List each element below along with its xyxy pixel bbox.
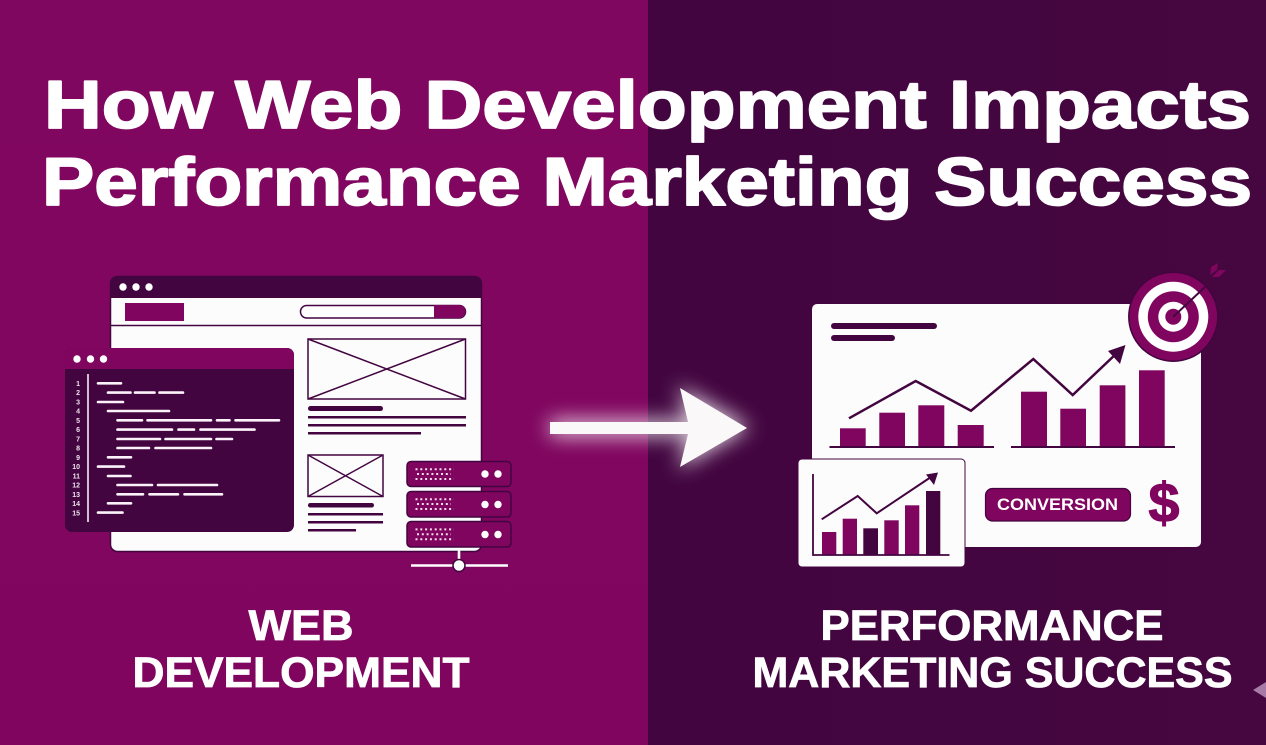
line numbers: 11 bbox=[73, 474, 80, 480]
line numbers: 15 bbox=[72, 510, 80, 518]
title bbox=[42, 67, 1252, 220]
line numbers: 9 bbox=[76, 455, 80, 462]
label: performance marketing success: PERFORMANCE bbox=[820, 602, 1164, 650]
dollar sign icon: $ bbox=[1148, 471, 1180, 534]
line numbers: 10 bbox=[72, 464, 80, 471]
small chart card bbox=[798, 459, 965, 567]
title: Performance Marketing Success bbox=[42, 144, 1252, 220]
line numbers: 6 bbox=[76, 427, 80, 434]
arrow: web development to performance marketing bbox=[550, 386, 750, 469]
line numbers: 13 bbox=[72, 492, 80, 499]
line numbers bbox=[72, 381, 80, 518]
corner mark bbox=[1253, 682, 1266, 698]
server stack bbox=[407, 462, 511, 572]
label: web development: DEVELOPMENT bbox=[132, 649, 469, 697]
label: performance marketing success bbox=[752, 602, 1232, 697]
line numbers: 1 bbox=[76, 381, 80, 388]
browser window bbox=[110, 276, 482, 552]
line numbers: 12 bbox=[72, 482, 80, 490]
line numbers: 3 bbox=[76, 400, 80, 406]
line numbers: 7 bbox=[76, 436, 80, 444]
line numbers: 4 bbox=[76, 408, 80, 416]
target icon bbox=[1129, 263, 1226, 361]
conversion badge: CONVERSION bbox=[997, 496, 1118, 514]
performance marketing illustration bbox=[798, 263, 1226, 567]
code editor window bbox=[65, 348, 294, 532]
label: performance marketing success: MARKETING SUCCESS bbox=[752, 649, 1232, 697]
line numbers: 8 bbox=[76, 446, 80, 452]
title: How Web Development Impacts bbox=[44, 67, 1251, 143]
right background panel bbox=[648, 0, 1266, 745]
label: web development: WEB bbox=[248, 602, 354, 650]
bar chart with trend line bbox=[830, 345, 1175, 447]
line numbers: 2 bbox=[76, 390, 80, 397]
conversion badge bbox=[986, 488, 1130, 521]
label: web development bbox=[132, 602, 469, 697]
line numbers: 14 bbox=[72, 501, 80, 508]
code lines bbox=[98, 383, 279, 513]
line numbers: 5 bbox=[76, 418, 80, 425]
dashboard panel bbox=[812, 304, 1201, 547]
web development illustration bbox=[65, 276, 511, 572]
left background panel bbox=[0, 0, 648, 745]
